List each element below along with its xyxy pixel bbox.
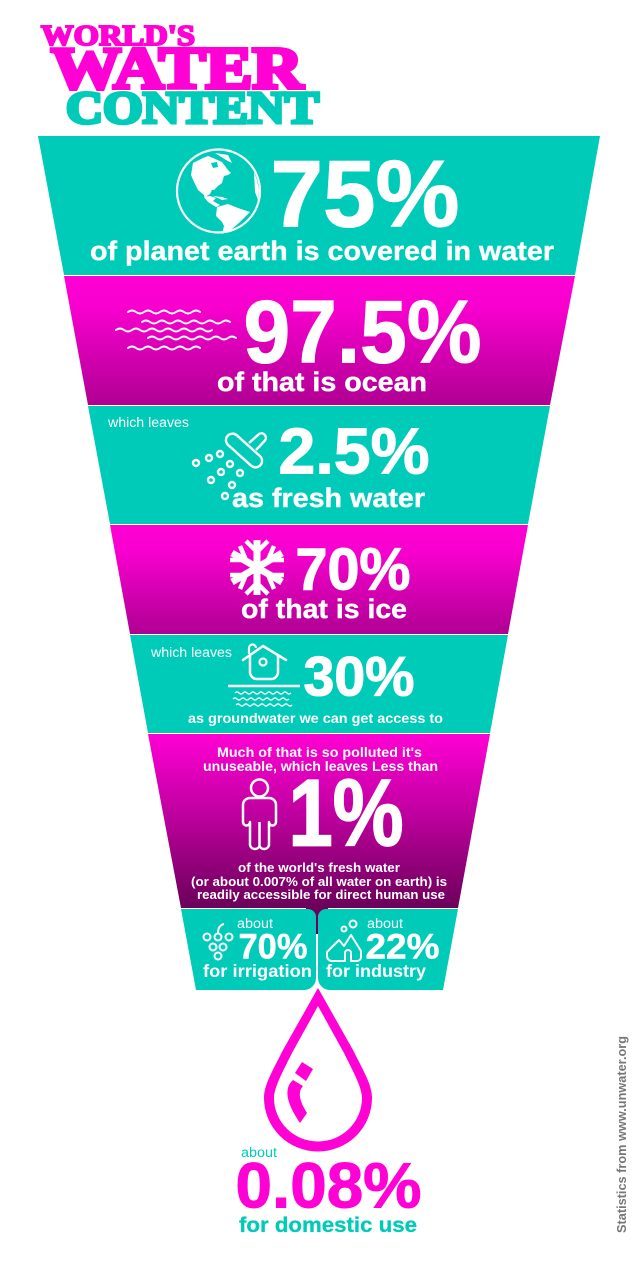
caption: of that is ocean <box>217 367 427 397</box>
icon: person <box>243 780 276 849</box>
label: which leaves <box>107 415 189 430</box>
caption: for domestic use <box>239 1214 417 1237</box>
title: CONTENT <box>66 83 319 133</box>
detail text: of the world's fresh water <box>238 861 400 875</box>
icon: grapes <box>204 924 232 960</box>
number: 70%: 70% <box>238 928 308 966</box>
number: 2.5%: 2.5% <box>278 414 430 488</box>
number: 22%: 22% <box>366 928 440 966</box>
title <box>41 21 319 133</box>
panel: 2.5% fresh water <box>88 406 550 524</box>
title: WORLD'S <box>41 21 195 52</box>
intro text: Much of that is so polluted it's <box>217 744 422 760</box>
icon: ocean waves <box>116 310 236 350</box>
intro text: unuseable, which leaves Less than <box>203 758 438 774</box>
icon: globe <box>177 150 260 234</box>
panel: less than 1% <box>148 734 490 908</box>
label: about <box>367 916 403 931</box>
divider notch between cards <box>306 908 328 934</box>
title: WATER <box>51 35 305 101</box>
intro text <box>203 744 438 774</box>
icon: snowflake <box>230 540 284 595</box>
number: 0.08%: 0.08% <box>236 1150 422 1222</box>
caption: of that is ice <box>241 594 407 624</box>
panel: domestic use <box>236 1145 422 1237</box>
panel: 30% groundwater <box>130 635 508 733</box>
caption: of planet earth is covered in water <box>90 236 555 266</box>
panel: 97.5% ocean <box>64 276 575 405</box>
label: which leaves <box>150 645 232 660</box>
number: 1%: 1% <box>288 760 404 866</box>
number: 30%: 30% <box>304 644 414 708</box>
icon: water drop <box>264 988 372 1151</box>
caption: as fresh water <box>232 483 426 513</box>
label: about <box>241 1145 277 1160</box>
detail text: readily accessible for direct human use <box>197 888 445 902</box>
number: 75%: 75% <box>270 142 460 248</box>
panel: 75% planet earth <box>38 136 600 275</box>
panel: 70% irrigation <box>181 909 316 990</box>
source note: Statistics from www.unwater.org <box>615 1036 629 1233</box>
caption: for industry <box>326 961 426 981</box>
label: about <box>237 916 273 931</box>
icon: house over groundwater <box>228 645 300 706</box>
panel: 70% ice <box>110 525 528 634</box>
icon: shower head <box>193 431 266 499</box>
icon: factory <box>327 920 361 961</box>
caption: as groundwater we can get access to <box>188 710 443 726</box>
number: 70%: 70% <box>296 536 410 602</box>
detail text: (or about 0.007% of all water on earth) is <box>191 875 447 889</box>
number: 97.5%: 97.5% <box>244 282 482 382</box>
panel: 22% industry <box>318 909 458 990</box>
detail text <box>191 861 447 902</box>
caption: for irrigation <box>203 961 312 981</box>
